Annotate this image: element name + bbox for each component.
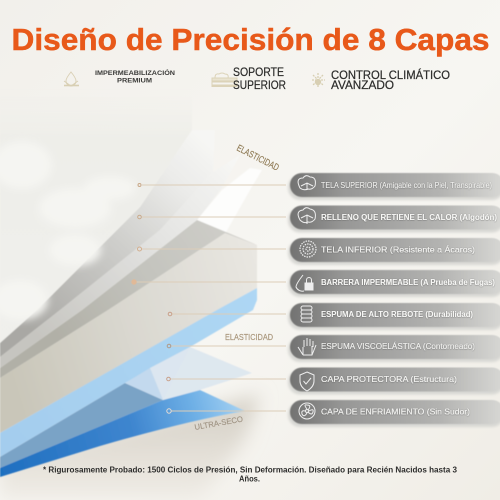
layer 6 pill (288, 335, 500, 362)
icon: spring (301, 306, 312, 322)
layer 3 pill (288, 238, 500, 265)
icon: snow and thermometer (312, 73, 325, 87)
title: Diseño de Precisión de 8 Capas (12, 23, 490, 57)
deep blue layer (0, 390, 245, 477)
icon: cotton (298, 176, 315, 190)
light blue connector (125, 347, 190, 400)
translucent membrane (150, 347, 252, 400)
mattress top surface (0, 220, 257, 378)
panel: layer list (288, 173, 500, 427)
label: SOPORTE (233, 67, 284, 79)
layer 7 pill: CAPA PROTECTORA (Estructura) (321, 375, 457, 384)
icon: mattress layers (212, 73, 237, 86)
feature: soporte: SUPERIOR (233, 80, 286, 92)
layer 1 pill (288, 173, 500, 200)
mattress illustration (0, 90, 262, 477)
icon: cotton boll (298, 208, 315, 224)
layer 8 pill (288, 400, 500, 427)
label: CONTROL CLIMÁTICO (331, 69, 450, 82)
icon: drop and lock (296, 275, 313, 291)
white sheet tip (197, 168, 262, 234)
layer 2 pill: RELLENO QUE RETIENE EL CALOR (Algodón) (321, 213, 497, 222)
footnote: Años. (239, 474, 260, 484)
callout lines and dots (132, 184, 286, 413)
textured blue layer (0, 383, 163, 468)
feature: soporte (212, 67, 286, 92)
label: elasticidad rotated: ELASTICIDAD (235, 143, 281, 174)
layer 5 pill: ESPUMA DE ALTO REBOTE (Durabilidad) (321, 310, 473, 319)
feature: impermeabilización: PREMIUM (117, 78, 152, 84)
layer 8 pill: CAPA DE ENFRIAMIENTO (Sin Sudor) (321, 408, 470, 416)
label: ultra-seco: ULTRA-SECO (194, 415, 244, 432)
layer 4 pill: BARRERA IMPERMEABLE (A Prueba de Fugas) (321, 278, 495, 287)
layer 3 pill: TELA INFERIOR (Resistente a Ácaros) (321, 246, 475, 254)
quilted top sheet (0, 90, 192, 343)
label: elasticidad: ELASTICIDAD (225, 333, 273, 342)
layer 7 pill (288, 368, 500, 394)
layer 6 pill: ESPUMA VISCOELÁSTICA (Contorneado) (321, 342, 475, 351)
icon: fabric mesh (300, 241, 316, 257)
label: IMPERMEABILIZACIÓN (95, 68, 175, 77)
mattress side (0, 232, 257, 433)
gray sheet (0, 130, 215, 357)
icon: water drop (64, 72, 79, 86)
blue layer one (0, 288, 257, 457)
feature: impermeabilización (64, 68, 175, 86)
floor shading (0, 395, 260, 500)
layer 4 pill (288, 270, 500, 297)
quilt puffs (0, 141, 136, 320)
footnote (43, 466, 458, 484)
layer 5 pill (288, 303, 500, 330)
layer 2 pill (288, 206, 500, 232)
light sheet (0, 155, 240, 368)
feature: control climático (312, 69, 450, 92)
feature: control climático: AVANZADO (331, 80, 394, 92)
icon: shield (300, 372, 314, 391)
footnote: * Rigurosamente Probado: 1500 Ciclos de Presión, Sin Deformación. Diseñado para Recién Nacidos hasta 3 (43, 466, 458, 474)
icon: hand (298, 338, 316, 355)
icon: fan (299, 403, 315, 419)
